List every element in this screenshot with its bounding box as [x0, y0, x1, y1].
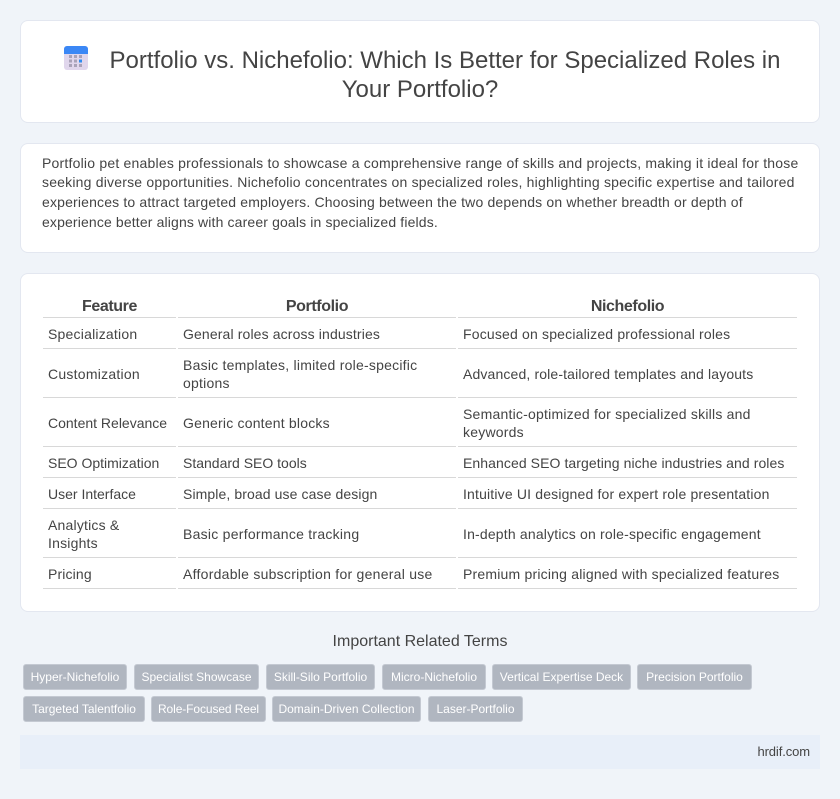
related term tags: Vertical Expertise Deck: [500, 670, 623, 684]
title: Portfolio vs. Nichefolio: Which Is Better for Specialized Roles in: [110, 47, 780, 74]
related term tags: Precision Portfolio: [646, 670, 743, 684]
row: content relevance: Generic content blocks: [183, 415, 330, 431]
related term tags: Domain-Driven Collection: [278, 702, 415, 716]
row: pricing: [48, 566, 779, 582]
row: customization: Basic templates, limited role-specific: [183, 357, 417, 373]
table header: portfolio: Portfolio: [286, 298, 348, 315]
related term tags: Skill-Silo Portfolio: [274, 670, 367, 684]
header card: [20, 20, 820, 123]
row: analytics and insights: Analytics &: [48, 517, 119, 533]
row: analytics and insights: [48, 517, 761, 551]
row: analytics and insights: Insights: [48, 535, 98, 551]
row: customization: Advanced, role-tailored templates and layouts: [463, 366, 753, 382]
row: seo optimization: Standard SEO tools: [183, 455, 307, 471]
row: content relevance: [48, 406, 751, 440]
row: user interface: Intuitive UI designed for expert role presentation: [463, 486, 770, 502]
description text: Portfolio pet enables professionals to showcase a comprehensive range of skills and projects, making it ideal for those: [42, 155, 798, 171]
table header: feature: Feature: [82, 298, 137, 315]
row: content relevance: Semantic-optimized for specialized skills and: [463, 406, 751, 422]
description text: [42, 155, 798, 230]
description text: experiences to attract targeted employers. Choosing between the two depends on whether breadth or depth of: [42, 194, 743, 210]
row: content relevance: keywords: [463, 424, 524, 440]
icon: calendar: [64, 46, 88, 70]
row: customization: options: [183, 375, 230, 391]
row: seo optimization: SEO Optimization: [48, 455, 159, 471]
row: user interface: User Interface: [48, 486, 136, 502]
related term tags: [23, 664, 752, 722]
row: analytics and insights: Basic performance tracking: [183, 526, 359, 542]
related terms heading: Important Related Terms: [333, 633, 507, 650]
description card: [20, 143, 820, 253]
row: user interface: [48, 486, 770, 502]
row: specialization: [48, 326, 730, 342]
title: Your Portfolio?: [342, 76, 498, 103]
related term tags: Micro-Nichefolio: [391, 670, 477, 684]
description text: experience better aligns with career goals in specialized fields.: [42, 214, 438, 230]
related term tags: Laser-Portfolio: [436, 702, 515, 716]
description text: seeking diverse opportunities. Nichefolio concentrates on specialized roles, highlighting specific expertise and tailored: [42, 174, 795, 190]
related term tags: Role-Focused Reel: [158, 702, 259, 716]
row: customization: [48, 357, 753, 391]
footer bar: [20, 735, 820, 769]
related term tags: Specialist Showcase: [141, 670, 252, 684]
table header: nichefolio: Nichefolio: [591, 298, 664, 315]
row: pricing: Premium pricing aligned with specialized features: [463, 566, 779, 582]
row: pricing: Affordable subscription for general use: [183, 566, 433, 582]
row: user interface: Simple, broad use case design: [183, 486, 377, 502]
title: [110, 47, 780, 103]
row: specialization: Focused on specialized professional roles: [463, 326, 730, 342]
row: customization: Customization: [48, 366, 140, 382]
row: seo optimization: [48, 455, 784, 471]
comparison table card: [20, 273, 820, 612]
related term tags: Hyper-Nichefolio: [31, 670, 119, 684]
row: seo optimization: Enhanced SEO targeting niche industries and roles: [463, 455, 784, 471]
row: content relevance: Content Relevance: [48, 415, 167, 431]
footer source: hrdif.com: [757, 744, 810, 759]
row: analytics and insights: In-depth analytics on role-specific engagement: [463, 526, 761, 542]
row: specialization: Specialization: [48, 326, 137, 342]
related term tags: Targeted Talentfolio: [32, 702, 136, 716]
row: specialization: General roles across industries: [183, 326, 380, 342]
row: pricing: Pricing: [48, 566, 92, 582]
